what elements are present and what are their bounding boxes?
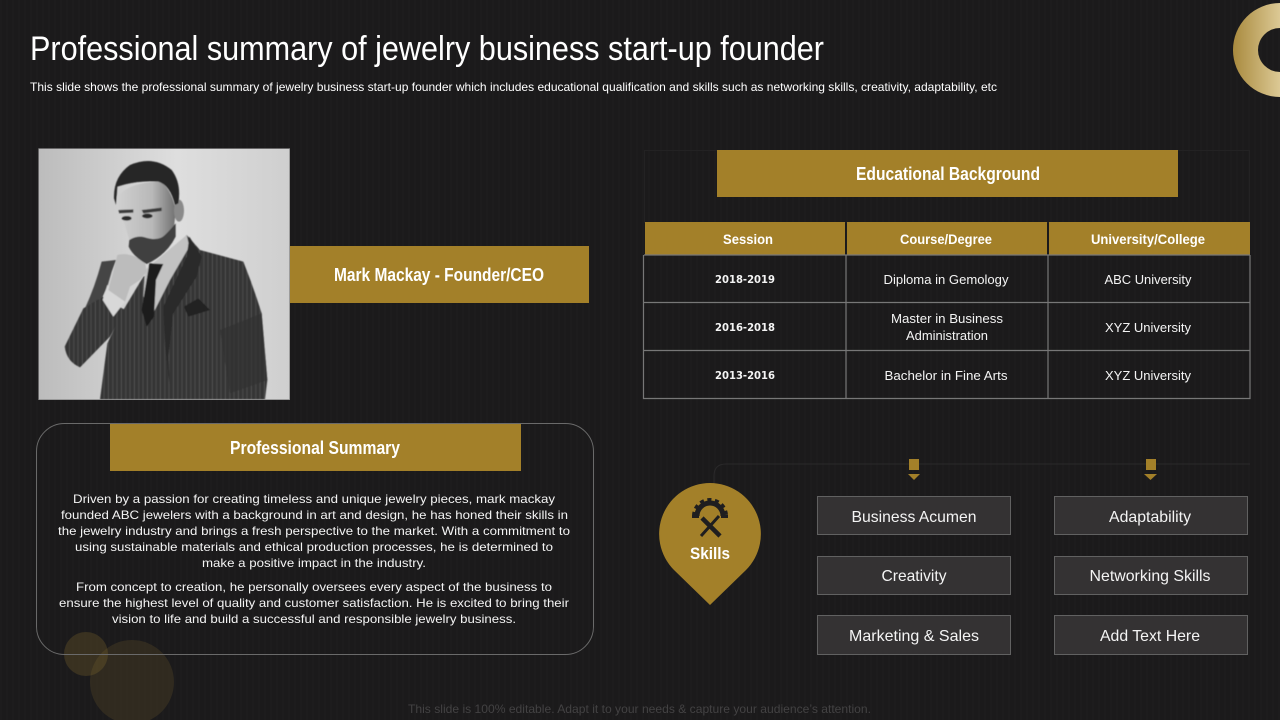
summary paragraph 2: ensure the highest level of quality and customer satisfaction. He is excited to bring their xyxy=(59,596,569,610)
skill: adaptability: Adaptability xyxy=(1109,509,1191,526)
table header: Course/Degree xyxy=(900,231,992,247)
skill: add text here xyxy=(1054,616,1248,654)
forearm xyxy=(65,297,125,367)
professional summary heading xyxy=(110,424,521,471)
tie xyxy=(142,263,163,327)
shirt xyxy=(143,235,189,312)
row 2013-2016: 2013-2016 xyxy=(715,369,775,382)
panel: educational background xyxy=(644,150,1250,398)
shoulder behind hand xyxy=(85,260,116,308)
footer note: This slide is 100% editable. Adapt it to your needs & capture your audience’s attention. xyxy=(408,702,871,716)
skill: business acumen: Business Acumen xyxy=(852,509,976,526)
decorative circles xyxy=(64,632,174,720)
table header xyxy=(645,222,1250,255)
row 2016-2018: Administration xyxy=(906,329,988,343)
right sleeve shadow xyxy=(220,313,267,393)
panel: professional summary xyxy=(36,424,594,654)
row 2018-2019 xyxy=(715,273,1192,287)
pocket square xyxy=(184,298,210,317)
row 2016-2018: Master in Business xyxy=(891,312,1003,326)
summary paragraph 2: vision to life and build a successful and responsible jewelry business. xyxy=(112,612,516,626)
ear xyxy=(174,200,184,222)
table header: Session xyxy=(723,231,773,247)
row 2013-2016 xyxy=(715,369,1192,383)
professional summary heading: Professional Summary xyxy=(230,438,400,458)
summary paragraph 2: From concept to creation, he personally oversees every aspect of the business to xyxy=(76,580,552,594)
skill: adaptability xyxy=(1054,496,1248,534)
summary paragraph 1 xyxy=(58,492,570,570)
summary paragraph 1: the jewelry industry and brings a fresh perspective to the market. With a commitment to xyxy=(58,524,570,538)
portrait photo xyxy=(38,148,290,400)
skill: marketing and sales xyxy=(818,616,1010,654)
beard xyxy=(129,223,176,264)
row 2018-2019: Diploma in Gemology xyxy=(884,273,1009,287)
skills label: Skills xyxy=(690,544,730,563)
skills connector line xyxy=(714,464,1250,484)
skill: creativity xyxy=(818,556,1010,594)
row 2018-2019: 2018-2019 xyxy=(715,273,775,286)
skills pin xyxy=(659,483,761,605)
face xyxy=(117,182,176,253)
lapel xyxy=(163,237,202,387)
skill: marketing and sales: Marketing & Sales xyxy=(849,628,979,645)
hair xyxy=(114,161,179,205)
skill: creativity: Creativity xyxy=(882,568,946,585)
education table xyxy=(644,222,1250,398)
subtitle: This slide shows the professional summary of jewelry business start-up founder which includes educational qualification and skills such as networking skills, creativity, adaptability, etc xyxy=(30,80,997,94)
educational background heading: Educational Background xyxy=(856,164,1040,184)
educational background heading xyxy=(717,150,1178,197)
jacket torso xyxy=(100,235,267,399)
row 2016-2018: 2016-2018 xyxy=(715,321,775,334)
skill: networking skills xyxy=(1054,556,1248,594)
decorative ring xyxy=(1233,3,1280,97)
table header: University/College xyxy=(1091,231,1205,247)
connector marker 1 xyxy=(908,459,920,480)
eyes and brows xyxy=(118,208,162,213)
skill: business acumen xyxy=(818,496,1010,534)
hand xyxy=(108,254,147,302)
row 2016-2018: XYZ University xyxy=(1105,321,1192,335)
skill: add text here: Add Text Here xyxy=(1100,628,1200,645)
summary paragraph 2 xyxy=(59,580,569,626)
row 2018-2019: ABC University xyxy=(1104,273,1192,287)
icon: gear and tools xyxy=(692,500,728,536)
name banner: Mark Mackay - Founder/CEO xyxy=(334,265,544,285)
cuff xyxy=(103,285,125,317)
summary paragraph 1: Driven by a passion for creating timeless and unique jewelry pieces, mark mackay xyxy=(73,492,555,506)
row 2016-2018 xyxy=(715,312,1192,343)
summary paragraph 1: make a positive impact in the industry. xyxy=(202,556,426,570)
skill: networking skills: Networking Skills xyxy=(1090,568,1210,585)
row 2013-2016: XYZ University xyxy=(1105,369,1192,383)
title: Professional summary of jewelry business start-up founder xyxy=(30,30,824,68)
summary paragraph 1: using sustainable materials and ethical production processes, he is determined to xyxy=(75,540,553,554)
connector marker 2 xyxy=(1144,459,1157,480)
row 2013-2016: Bachelor in Fine Arts xyxy=(884,369,1008,383)
summary paragraph 1: founded ABC jewelers with a background in art and design, he has honed their skills in xyxy=(61,508,568,522)
name banner xyxy=(290,246,589,303)
